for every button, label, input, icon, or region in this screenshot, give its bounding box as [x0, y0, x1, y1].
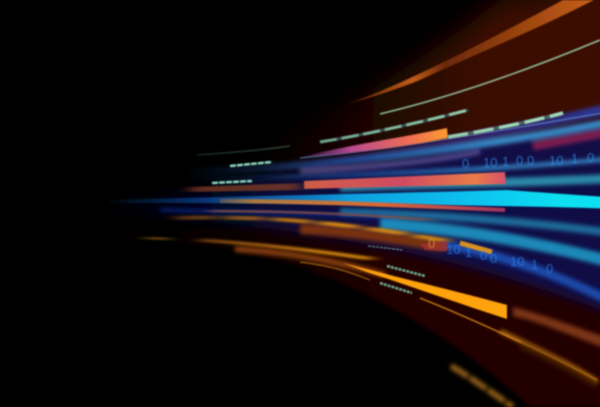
brown arc right — [513, 307, 600, 354]
lower orange dashed arc — [451, 366, 513, 407]
binary digits upper row: 10 — [483, 155, 497, 170]
teal dashes on lower band — [368, 246, 425, 293]
pink to orange upper bar — [300, 128, 448, 158]
upper maroon wedge — [230, 0, 600, 180]
binary digits upper row: 1 — [502, 154, 509, 169]
binary digits lower row: 0 — [428, 236, 435, 251]
coral middle bar — [304, 172, 506, 189]
lower maroon wedge — [130, 205, 600, 407]
binary digits upper row: 0 — [516, 153, 523, 168]
binary digits lower row: 0 — [490, 251, 497, 266]
pink thin streak — [210, 211, 430, 220]
red end of upper gold band — [420, 241, 448, 251]
binary digits upper row: 0 — [462, 156, 469, 171]
mint thin arc — [380, 40, 600, 114]
binary digits lower row: 10 — [510, 254, 524, 269]
bright cyan band — [110, 190, 600, 209]
blue light fan — [100, 112, 600, 325]
thin pale blue line — [300, 110, 600, 158]
faint orange dash left — [190, 183, 300, 192]
binary digits upper row: 10 — [549, 153, 563, 168]
binary digits upper row: 0 — [527, 153, 534, 168]
top orange arc — [347, 0, 594, 104]
binary digits lower row: 10 — [446, 242, 460, 257]
binary digits upper row: 0 — [587, 150, 594, 165]
binary digits lower row: 1 — [531, 257, 538, 272]
binary digits lower row: 0 — [480, 248, 487, 263]
big yellow orange band — [343, 263, 507, 319]
orange line below cyan — [220, 199, 505, 212]
binary digits lower row: 1 — [465, 245, 472, 260]
blue and purple streaks — [160, 106, 600, 306]
binary digits lower row: 0 — [546, 261, 553, 276]
binary digits upper row: 1 — [571, 151, 578, 166]
gold curved streaks — [145, 218, 598, 385]
mint dashed streaks — [197, 110, 563, 183]
